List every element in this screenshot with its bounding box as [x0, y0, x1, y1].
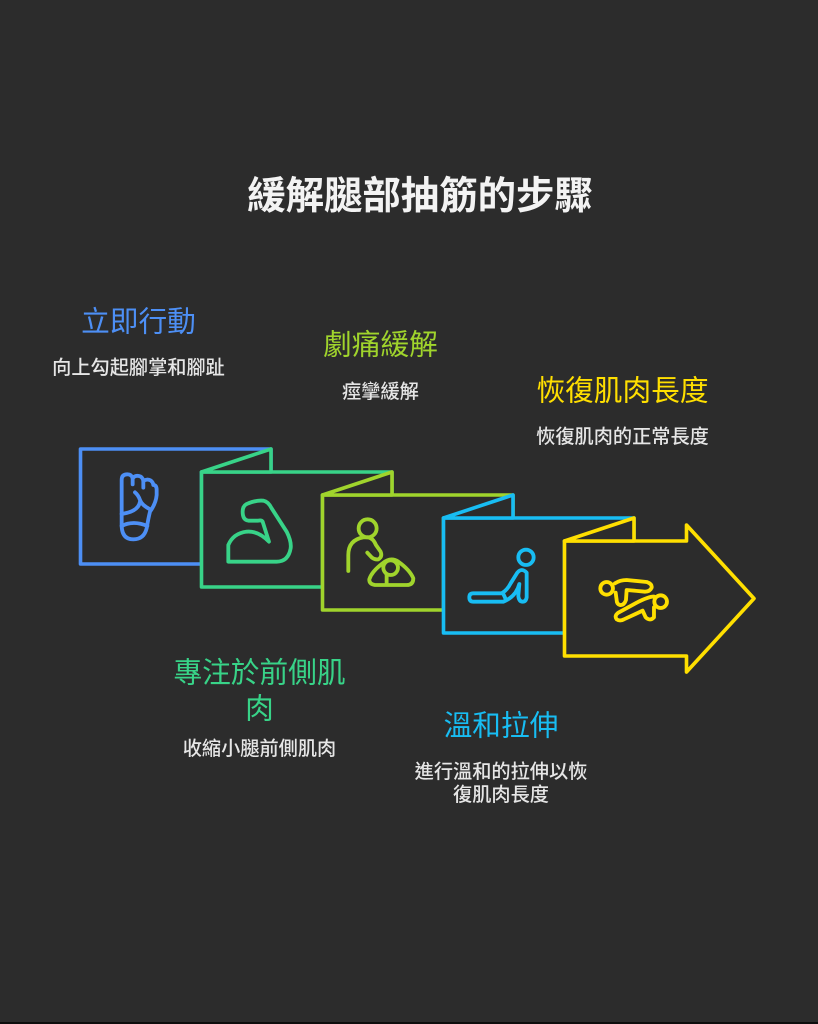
title: 緩解腿部抽筋的步驟	[247, 175, 593, 218]
step 2 label: 專注於前側肌肉: 收縮小腿前側肌肉	[183, 738, 336, 760]
step 5 label: 恢復肌肉長度: 恢復肌肉長度	[536, 376, 709, 408]
step 1 label: 立即行動: 立即行動	[81, 307, 196, 339]
step 1 label: 立即行動	[52, 307, 225, 379]
step 2 label: 專注於前側肌肉: 肉	[245, 694, 274, 726]
icon: massage	[348, 519, 413, 585]
step 1 label: 立即行動: 向上勾起腳掌和腳趾	[52, 357, 225, 379]
icon: foot	[122, 474, 157, 539]
step 3 label: 劇痛緩解: 痙攣緩解	[342, 381, 419, 403]
step 3 label: 劇痛緩解: 劇痛緩解	[323, 330, 438, 362]
step 4 label: 溫和拉伸: 溫和拉伸	[444, 711, 558, 743]
step 4 label: 溫和拉伸: 復肌肉長度	[453, 784, 549, 806]
step 1 panel: blue	[80, 449, 271, 564]
step 5 label: 恢復肌肉長度: 恢復肌肉的正常長度	[536, 426, 709, 448]
step 4 panel: cyan	[444, 495, 634, 633]
icon: flexed arm	[228, 501, 291, 562]
step 3 panel: lime	[322, 472, 513, 610]
icon: stretch	[469, 550, 534, 602]
step 2 panel: green	[202, 449, 392, 587]
icon: two people	[600, 580, 667, 620]
step 4 label: 溫和拉伸: 進行溫和的拉伸以恢	[415, 761, 587, 783]
step 2 label: 專注於前側肌肉: 專注於前側肌	[173, 658, 346, 690]
step 3 label: 劇痛緩解	[323, 330, 438, 403]
step 2 label: 專注於前側肌肉	[173, 658, 346, 760]
step 5 panel: yellow arrow	[564, 518, 754, 672]
step 5 label: 恢復肌肉長度	[536, 376, 709, 448]
step 4 label: 溫和拉伸	[415, 711, 587, 806]
